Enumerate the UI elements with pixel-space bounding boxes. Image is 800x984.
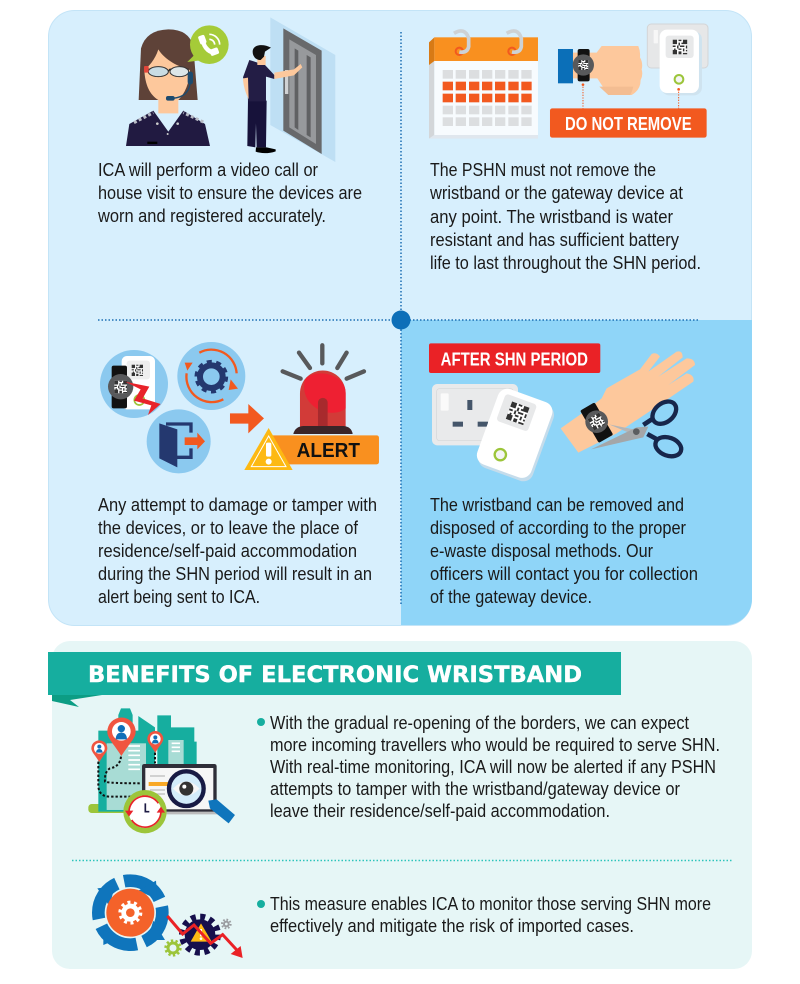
text: must not remove: life to last throughout the SHN period. bbox=[430, 253, 701, 273]
text: disposal after SHN: of the gateway device. bbox=[430, 587, 592, 607]
icon: officer on video call and officer at door bbox=[126, 17, 335, 162]
icon: tamper, settings and exit leading to alert bbox=[100, 342, 379, 473]
text: disposal after SHN: disposed of according to the proper bbox=[430, 518, 686, 538]
bullet text: real-time monitoring: more incoming travellers who would be required to serve SHN. bbox=[270, 735, 720, 755]
panel: benefits of electronic wristband bbox=[52, 641, 752, 969]
text: video call or house visit: house visit to ensure the devices are bbox=[98, 183, 362, 203]
bullet text: real-time monitoring: leave their residence/self-paid accommodation. bbox=[270, 801, 610, 821]
text: tampering results in alert: Any attempt to damage or tamper with bbox=[98, 495, 377, 515]
text: tampering results in alert bbox=[98, 495, 377, 607]
label: do not remove: DO NOT REMOVE bbox=[565, 113, 692, 134]
text: tampering results in alert: residence/self-paid accommodation bbox=[98, 541, 357, 561]
text: video call or house visit bbox=[97, 160, 362, 226]
bullet text: real-time monitoring bbox=[257, 713, 720, 821]
text: must not remove: The PSHN must not remove the bbox=[430, 160, 656, 180]
text: video call or house visit: worn and registered accurately. bbox=[97, 206, 326, 226]
text: tampering results in alert: alert being sent to ICA. bbox=[98, 587, 260, 607]
text: disposal after SHN: e-waste disposal methods. Our bbox=[430, 541, 653, 561]
text: tampering results in alert: during the SHN period will result in an bbox=[98, 564, 372, 584]
text: disposal after SHN: The wristband can be removed and bbox=[430, 495, 684, 515]
icon: removing wristband with scissors, gateway device and after SHN period label bbox=[429, 343, 695, 484]
heading ribbon: benefits of electronic wristband bbox=[48, 652, 621, 707]
text: disposal after SHN bbox=[430, 495, 698, 607]
text: disposal after SHN: officers will contact you for collection bbox=[430, 564, 698, 584]
text: must not remove: wristband or the gateway device at bbox=[429, 183, 683, 203]
icon: process cycle, gears and declining risk bbox=[97, 881, 243, 958]
panel: how the wristband works bbox=[48, 10, 752, 626]
bullet text: real-time monitoring: With the gradual re-opening of the borders, we can expect bbox=[270, 713, 689, 733]
bullet text: real-time monitoring: With real-time monitoring, ICA will now be alerted if any PSHN bbox=[270, 757, 716, 777]
text: must not remove: resistant and has sufficient battery bbox=[430, 230, 679, 250]
quadrant: after SHN period background bbox=[401, 320, 752, 625]
bullet text: real-time monitoring: attempts to tamper with the wristband/gateway device or bbox=[270, 779, 680, 799]
label: alert: ALERT bbox=[297, 439, 360, 462]
text: tampering results in alert: the devices, or to leave the place of bbox=[98, 518, 359, 538]
bullet text: monitor more effectively: effectively and mitigate the risk of imported cases. bbox=[270, 916, 634, 936]
text: must not remove: any point. The wristband is water bbox=[430, 207, 673, 227]
icon: city map pins and monitoring laptop bbox=[88, 708, 235, 833]
centre dot bbox=[392, 310, 410, 330]
bullet text: monitor more effectively: This measure enables ICA to monitor those serving SHN more bbox=[270, 894, 711, 914]
heading ribbon: benefits of electronic wristband: BENEFITS OF ELECTRONIC WRISTBAND bbox=[88, 663, 582, 688]
text: video call or house visit: ICA will perform a video call or bbox=[98, 160, 318, 180]
bullet text: monitor more effectively bbox=[257, 894, 711, 936]
label: after SHN period: AFTER SHN PERIOD bbox=[441, 348, 588, 369]
icon: calendar, wrist and gateway device with do not remove sign bbox=[429, 24, 708, 139]
text: must not remove bbox=[429, 160, 701, 273]
